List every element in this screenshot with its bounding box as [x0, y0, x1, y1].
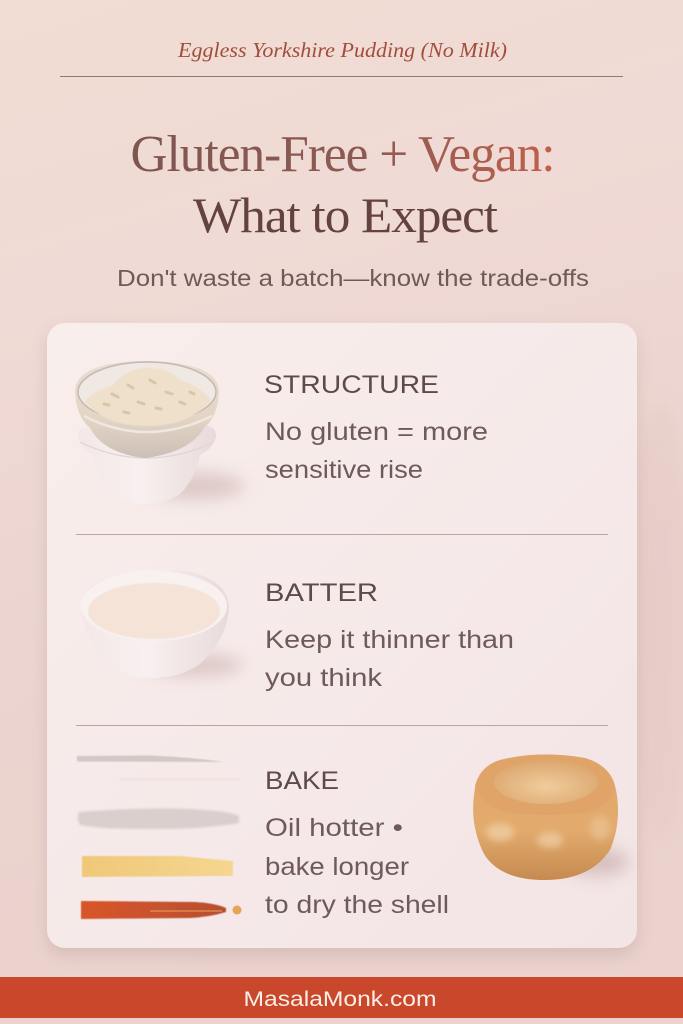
- structure text: STRUCTURE: [264, 371, 439, 399]
- header label: Eggless Yorkshire Pudding (No Milk): [177, 38, 507, 62]
- icon: doneness swatches: [77, 756, 242, 919]
- bake text: to dry the shell: [265, 891, 449, 919]
- row: structure: [75, 361, 488, 504]
- bake text: bake longer: [265, 853, 409, 881]
- title: Gluten-Free + Vegan:: [130, 126, 554, 183]
- bake text: BAKE: [265, 767, 339, 795]
- structure text: No gluten = more: [265, 418, 488, 446]
- icon: flour in glass bowl stacked on white bowl: [75, 361, 245, 504]
- batter text: Keep it thinner than: [265, 626, 514, 654]
- batter text: [265, 579, 514, 692]
- row: bake: [77, 754, 629, 919]
- batter text: BATTER: [265, 579, 378, 607]
- row: batter: [81, 569, 514, 692]
- footer bar: MasalaMonk.com: [244, 988, 436, 1011]
- bake text: Oil hotter •: [265, 814, 403, 842]
- title: What to Expect: [193, 187, 498, 243]
- icon: bowl of batter: [81, 569, 243, 678]
- footer bar: [0, 977, 683, 1018]
- structure text: [264, 371, 488, 484]
- structure text: sensitive rise: [265, 456, 423, 484]
- icon: baked yorkshire pudding: [473, 754, 629, 880]
- subtitle: Don't waste a batch—know the trade-offs: [117, 265, 589, 291]
- bake text: [265, 767, 449, 919]
- batter text: you think: [265, 664, 383, 692]
- title: [130, 126, 554, 243]
- panel: trade-offs card: [47, 323, 637, 955]
